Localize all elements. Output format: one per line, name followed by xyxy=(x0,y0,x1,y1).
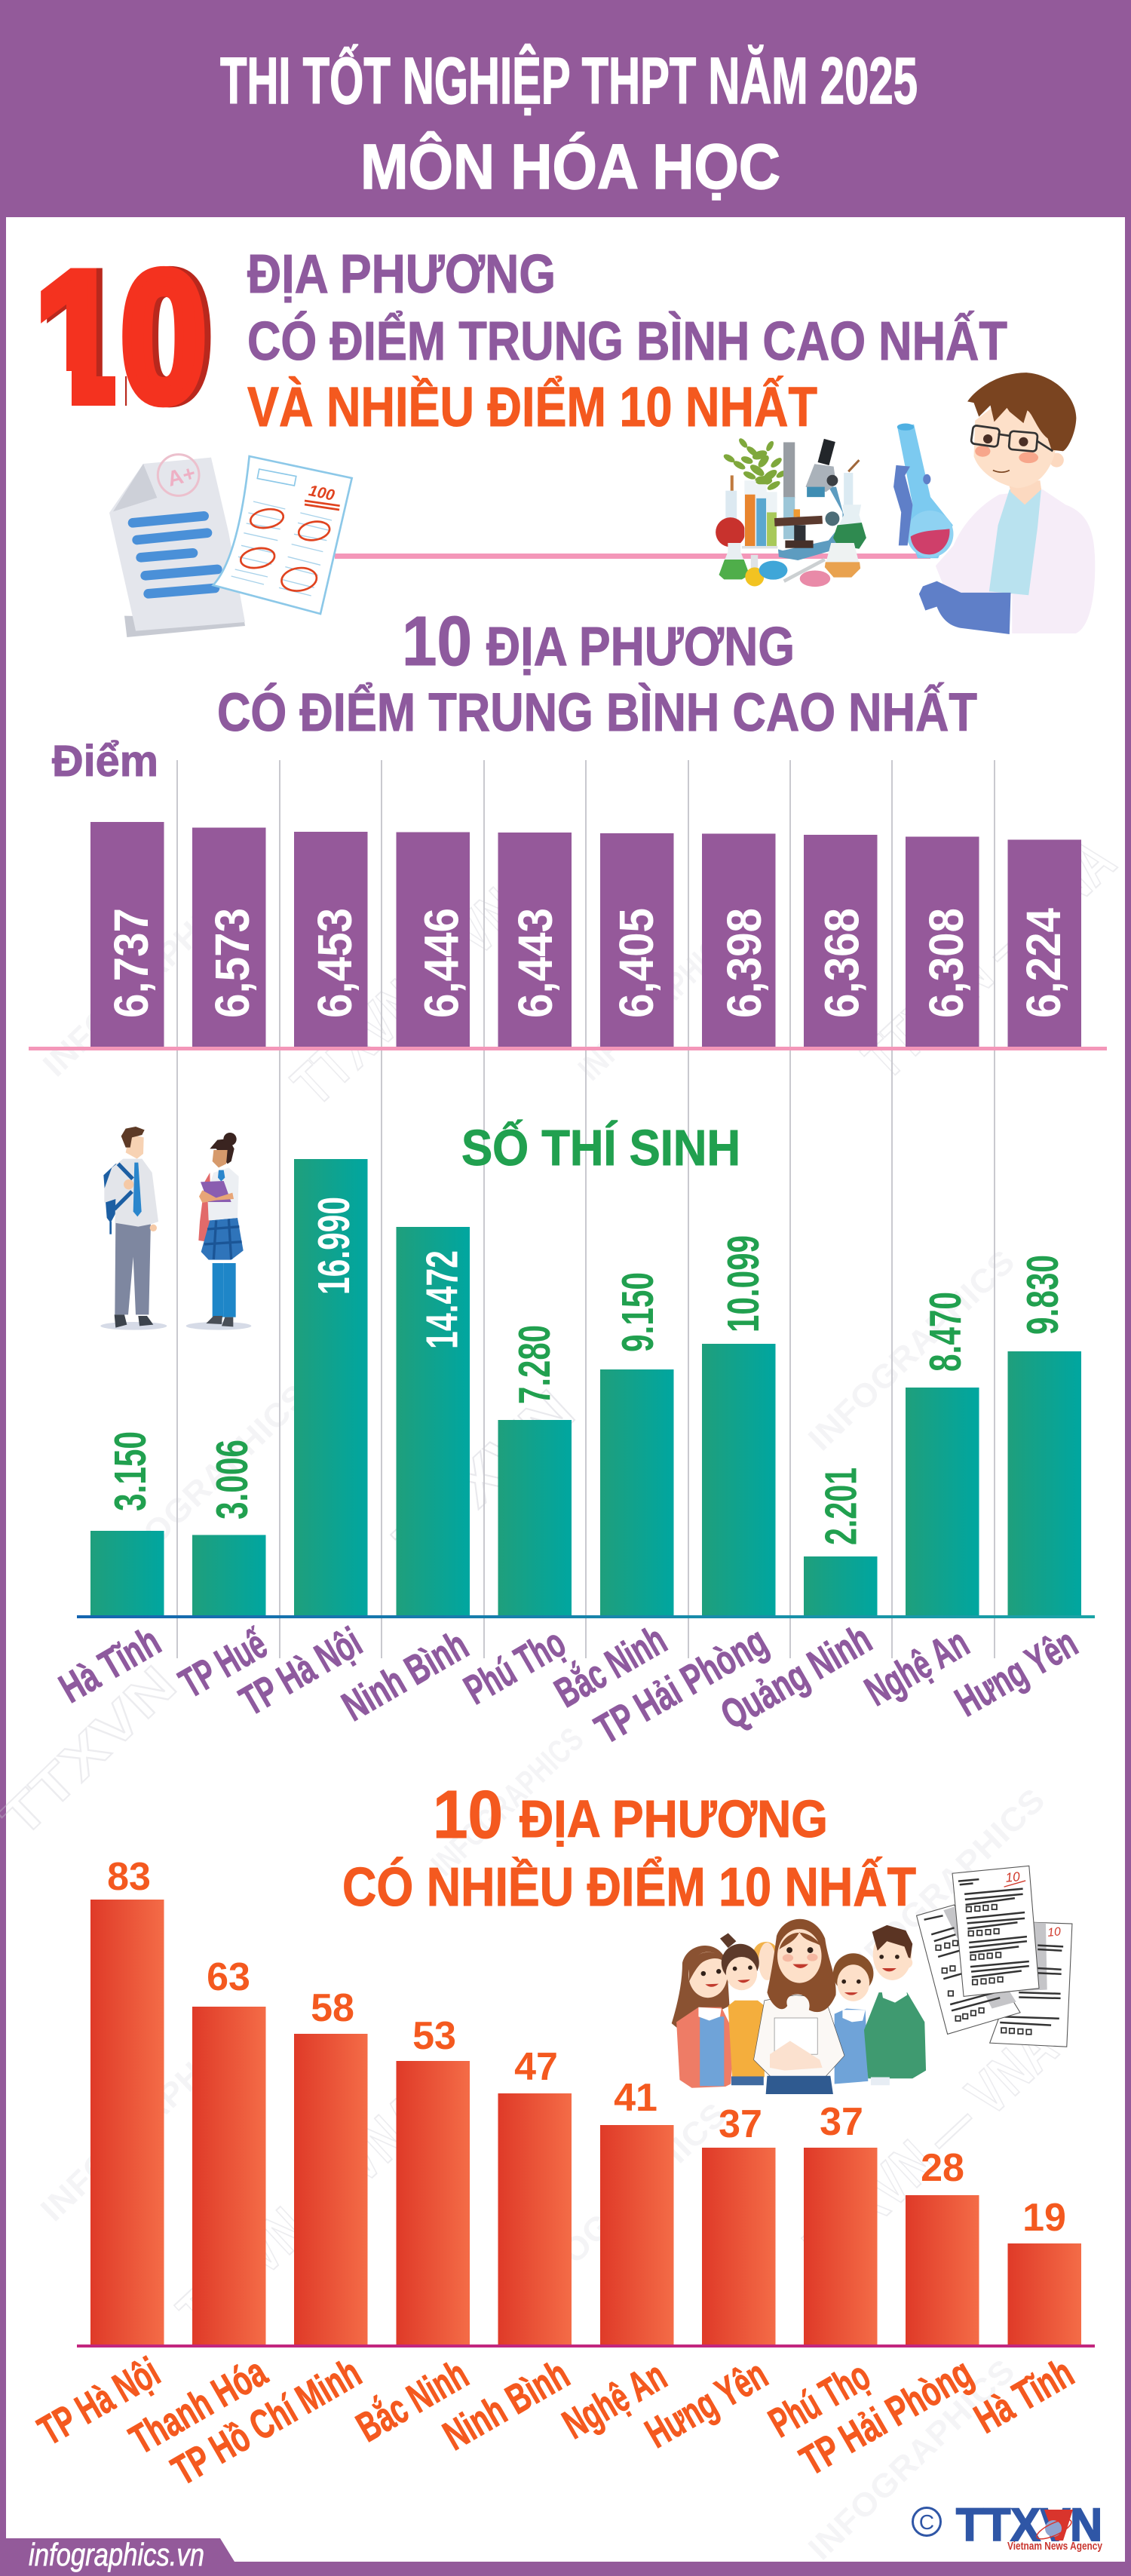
category labels: perfect scores chart: Hưng Yên xyxy=(637,2351,775,2457)
watermarks: INFOGRAPHICS xyxy=(832,1781,1053,1996)
heading: number of candidates: SỐ THÍ SINH xyxy=(461,1119,740,1176)
category labels: candidates chart: Ninh Bình xyxy=(334,1621,476,1730)
subtitle block: CÓ ĐIỂM TRUNG BÌNH CAO NHẤT xyxy=(247,311,1007,372)
watermarks: INFOGRAPHICS xyxy=(802,2352,1022,2567)
bar chart: average score: 6,446 xyxy=(415,908,469,1018)
bar chart: average score: 6,453 xyxy=(308,908,362,1018)
bar chart: number of candidates: 8.470 xyxy=(921,1292,970,1372)
bar chart: average score: 6,368 xyxy=(814,908,869,1018)
bar chart: most perfect scores: 41 xyxy=(614,2076,657,2120)
bar chart: most perfect scores xyxy=(77,1855,1095,2348)
logo: TTXVN: TTXVN xyxy=(956,2499,1102,2550)
subtitle block xyxy=(247,244,1007,438)
icon: exam sheets: 10 xyxy=(1005,1869,1021,1885)
header title: MÔN HÓA HỌC xyxy=(360,131,780,202)
category labels: perfect scores chart: Ninh Bình xyxy=(435,2351,577,2459)
category labels: candidates chart: TP Hà Nội xyxy=(231,1618,369,1725)
bar chart: number of candidates: 16.990 xyxy=(309,1197,359,1295)
chart heading: average score xyxy=(217,602,977,743)
big number 10: 10 xyxy=(41,233,213,440)
bar chart: average score: 6,224 xyxy=(1016,908,1071,1018)
watermarks: INFOGRAPHICS xyxy=(34,2013,255,2228)
bar chart: number of candidates: 9.830 xyxy=(1018,1255,1068,1335)
bar chart: average score: 6,308 xyxy=(919,908,973,1018)
category labels: candidates chart: TP Hải Phòng xyxy=(587,1618,775,1753)
pink divider line xyxy=(335,554,930,559)
logo: TTXVN: C xyxy=(919,2510,934,2534)
bar chart: number of candidates: 10.099 xyxy=(719,1235,768,1332)
chart heading: average score: CÓ ĐIỂM TRUNG BÌNH CAO NHẤT xyxy=(217,682,977,743)
category labels: candidates chart: Bắc Ninh xyxy=(547,1616,674,1716)
icon: exam papers: 100 xyxy=(307,482,336,504)
watermarks: INFOGRAPHICS xyxy=(802,1243,1022,1458)
watermarks: INFOGRAPHICS xyxy=(513,2096,734,2311)
big number 10 xyxy=(41,265,211,407)
watermarks: TTXVN xyxy=(382,1377,587,1575)
chart heading: most perfect scores: CÓ NHIỀU ĐIỂM 10 NHẤT xyxy=(342,1857,916,1918)
bar chart: number of candidates xyxy=(77,1159,1095,1618)
logo: TTXVN: Vietnam News Agency xyxy=(1007,2540,1103,2553)
category labels: candidates chart: Quảng Ninh xyxy=(713,1615,879,1738)
bar chart: average score: 6,405 xyxy=(609,908,664,1018)
category labels: candidates chart xyxy=(51,1615,1085,1753)
bar chart: number of candidates: 14.472 xyxy=(418,1250,467,1349)
category labels: perfect scores chart: Bắc Ninh xyxy=(348,2351,476,2451)
bar chart: average score: 6,443 xyxy=(508,908,562,1018)
bar chart: most perfect scores: 37 xyxy=(820,2100,863,2144)
watermarks: TTXVN — VNA xyxy=(280,853,557,1118)
chart heading: most perfect scores: 10 xyxy=(433,1777,503,1853)
bar chart: most perfect scores: 19 xyxy=(1022,2196,1066,2240)
bar chart: number of candidates: 3.150 xyxy=(106,1431,155,1511)
bar chart: most perfect scores: 37 xyxy=(719,2102,762,2146)
icon: laboratory equipment xyxy=(716,437,866,587)
bar chart: number of candidates: 2.201 xyxy=(816,1467,866,1545)
category labels: perfect scores chart: Thanh Hóa xyxy=(122,2348,274,2463)
icon: exam papers: A+ xyxy=(165,461,198,492)
watermarks: INFOGRAPHICS xyxy=(36,874,252,1084)
bar chart: number of candidates: 9.150 xyxy=(613,1272,663,1352)
bar chart: average score: 6,737 xyxy=(104,908,158,1018)
chart heading: most perfect scores xyxy=(342,1777,916,1918)
category labels: perfect scores chart: Hà Tĩnh xyxy=(967,2349,1081,2442)
bar chart: number of candidates: 3.006 xyxy=(207,1440,257,1520)
icon: exam papers xyxy=(109,455,352,637)
icon: scientist with flask xyxy=(893,373,1095,634)
category labels: perfect scores chart: Phú Thọ xyxy=(761,2352,878,2446)
category labels: perfect scores chart: TP Hà Nội xyxy=(30,2348,167,2454)
bar chart: average score xyxy=(29,822,1107,1050)
subtitle block: VÀ NHIỀU ĐIỂM 10 NHẤT xyxy=(247,376,817,438)
icon: teacher and students xyxy=(672,1919,926,2094)
axis label: Điểm: Điểm xyxy=(52,737,158,786)
bar chart: average score: 6,398 xyxy=(717,908,771,1018)
big number 10: 10 xyxy=(35,233,207,440)
category labels: perfect scores chart: Nghệ An xyxy=(555,2352,674,2448)
bar chart: most perfect scores: 83 xyxy=(107,1855,151,1899)
bar chart: most perfect scores: 58 xyxy=(311,1986,354,2030)
chart heading: average score: 10 xyxy=(402,602,472,680)
watermarks: TTXVN — VNA xyxy=(165,2081,443,2345)
bar chart: most perfect scores: 63 xyxy=(207,1955,250,1999)
category labels: perfect scores chart: TP Hải Phòng xyxy=(792,2349,980,2484)
category labels: perfect scores chart xyxy=(30,2348,1081,2494)
column gridlines xyxy=(177,760,995,1658)
watermarks xyxy=(0,826,1128,2567)
watermarks: INFOGRAPHICS xyxy=(572,919,743,1087)
category labels: candidates chart: TP Huế xyxy=(171,1621,274,1707)
bar chart: most perfect scores: 53 xyxy=(412,2014,456,2058)
bar chart: average score: 6,573 xyxy=(205,908,259,1018)
header title xyxy=(220,44,918,202)
category labels: perfect scores chart: TP Hồ Chí Minh xyxy=(164,2349,369,2494)
chart heading: average score: ĐỊA PHƯƠNG xyxy=(486,617,795,677)
icon: exam sheets xyxy=(917,1866,1072,2047)
subtitle block: ĐỊA PHƯƠNG xyxy=(247,244,556,305)
category labels: candidates chart: Hà Tĩnh xyxy=(51,1618,168,1712)
icon: male student xyxy=(100,1127,167,1330)
watermarks: INFOGRAPHICS xyxy=(95,1377,316,1592)
chart heading: most perfect scores: ĐỊA PHƯƠNG xyxy=(520,1789,828,1848)
bar chart: number of candidates: 7.280 xyxy=(510,1325,559,1404)
category labels: candidates chart: Nghệ An xyxy=(857,1619,976,1715)
bar chart: most perfect scores: 28 xyxy=(921,2146,964,2190)
watermarks: INFOGRAPHICS xyxy=(425,1720,591,1883)
bar chart: most perfect scores: 47 xyxy=(514,2045,558,2089)
footer tab: infographics.vn xyxy=(29,2537,204,2572)
category labels: candidates chart: Phú Thọ xyxy=(456,1619,573,1713)
icon: exam sheets: 10 xyxy=(1047,1925,1062,1940)
icon: female student xyxy=(186,1133,251,1330)
